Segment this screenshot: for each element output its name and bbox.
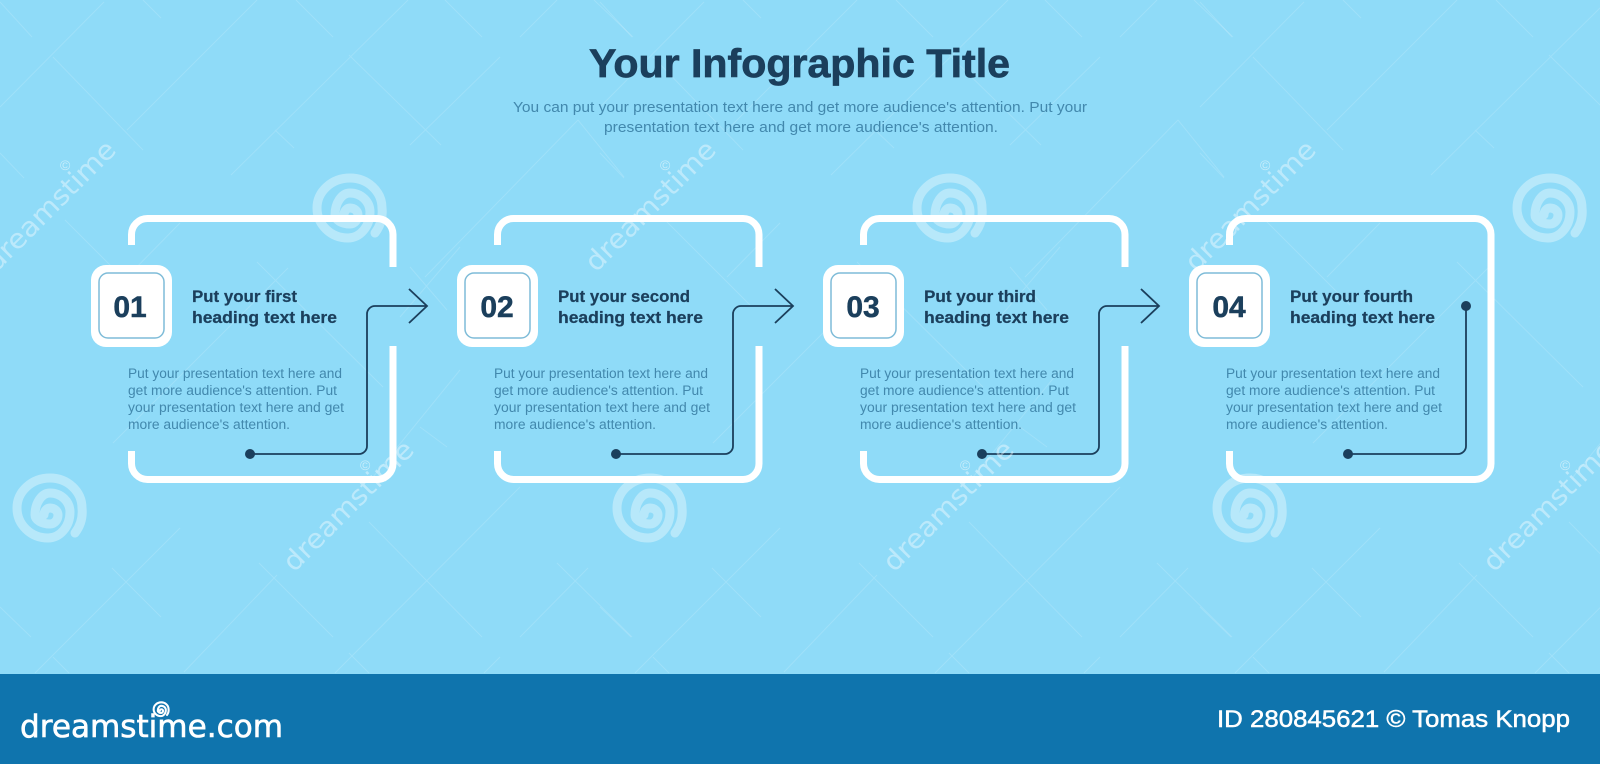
step 4 text	[1226, 366, 1442, 432]
panel: step 1	[91, 218, 427, 480]
step 2 text: Put your presentation text here and	[494, 366, 708, 381]
step 4 badge: 04	[1212, 291, 1246, 324]
step 1 badge: 01	[113, 291, 147, 324]
step 3 heading: Put your third	[924, 287, 1036, 306]
footer bar	[0, 674, 1600, 764]
step 3 text: Put your presentation text here and	[860, 366, 1074, 381]
step 3 arrow	[977, 289, 1159, 459]
step 3 heading: heading text here	[924, 308, 1069, 327]
step 4 heading: heading text here	[1290, 308, 1435, 327]
step 1 arrow	[245, 289, 427, 459]
step 4 text: more audience's attention.	[1226, 417, 1388, 432]
footer credit: ID 280845621 © Tomas Knopp	[1217, 706, 1570, 733]
footer logo: dreamstime.com	[20, 709, 283, 745]
watermark: swirl logos	[17, 178, 1582, 538]
step 4 heading: Put your fourth	[1290, 287, 1413, 306]
step 4 text: get more audience's attention. Put	[1226, 383, 1435, 398]
step 2 heading: heading text here	[558, 308, 703, 327]
panel: step 3	[823, 218, 1159, 480]
watermark: diagonal text: ©	[1560, 457, 1571, 473]
step 3 text: more audience's attention.	[860, 417, 1022, 432]
step 1 text: more audience's attention.	[128, 417, 290, 432]
step 2 badge: 02	[480, 291, 514, 324]
watermark: diagonal text: dreamstime	[277, 434, 421, 578]
step 2 text: your presentation text here and get	[494, 400, 710, 415]
step 2 badge	[457, 265, 538, 347]
subtitle: presentation text here and get more audience's attention.	[604, 119, 998, 136]
step 1 heading	[192, 287, 337, 327]
watermark: diagonal text: ©	[360, 457, 371, 473]
step 4 badge	[1189, 265, 1270, 347]
step 1 text: your presentation text here and get	[128, 400, 344, 415]
step 3 text: your presentation text here and get	[860, 400, 1076, 415]
watermark: diagonal text: dreamstime	[877, 434, 1021, 578]
step 2 text: more audience's attention.	[494, 417, 656, 432]
step 4 text: Put your presentation text here and	[1226, 366, 1440, 381]
panel: step 4	[1189, 218, 1491, 480]
step 2 heading: Put your second	[558, 287, 690, 306]
step 1 heading: heading text here	[192, 308, 337, 327]
step 3 text	[860, 366, 1076, 432]
step 3 text: get more audience's attention. Put	[860, 383, 1069, 398]
step 3 frame	[864, 218, 1125, 480]
title: Your Infographic Title	[589, 42, 1010, 86]
step 1 text: Put your presentation text here and	[128, 366, 342, 381]
subtitle: You can put your presentation text here and get more audience's attention. Put your	[513, 99, 1087, 116]
watermark: diagonal text: ©	[60, 157, 71, 173]
step 2 heading	[558, 287, 703, 327]
step 1 frame	[132, 218, 393, 480]
step 1 badge	[91, 265, 172, 347]
watermark: diagonal text	[0, 134, 1600, 578]
watermark: diagonal text: dreamstime	[579, 134, 723, 278]
watermark: diagonal text: ©	[1260, 157, 1271, 173]
step 3 badge	[823, 265, 904, 347]
step 2 text	[494, 366, 710, 432]
step 4 connector	[1343, 301, 1471, 459]
step 2 frame	[498, 218, 759, 480]
watermark: diagonal text: dreamstime	[1179, 134, 1323, 278]
step 3 badge: 03	[846, 291, 880, 324]
step 1 text	[128, 366, 344, 432]
subtitle	[513, 99, 1087, 136]
step 3 heading	[924, 287, 1069, 327]
step 2 text: get more audience's attention. Put	[494, 383, 703, 398]
step 2 arrow	[611, 289, 793, 459]
watermark: diagonal text: ©	[660, 157, 671, 173]
step 4 frame	[1230, 218, 1491, 480]
step 1 text: get more audience's attention. Put	[128, 383, 337, 398]
step 4 text: your presentation text here and get	[1226, 400, 1442, 415]
step 4 heading	[1290, 287, 1435, 327]
watermark: diagonal text: ©	[960, 457, 971, 473]
panel: step 2	[457, 218, 793, 480]
step 1 heading: Put your first	[192, 287, 297, 306]
